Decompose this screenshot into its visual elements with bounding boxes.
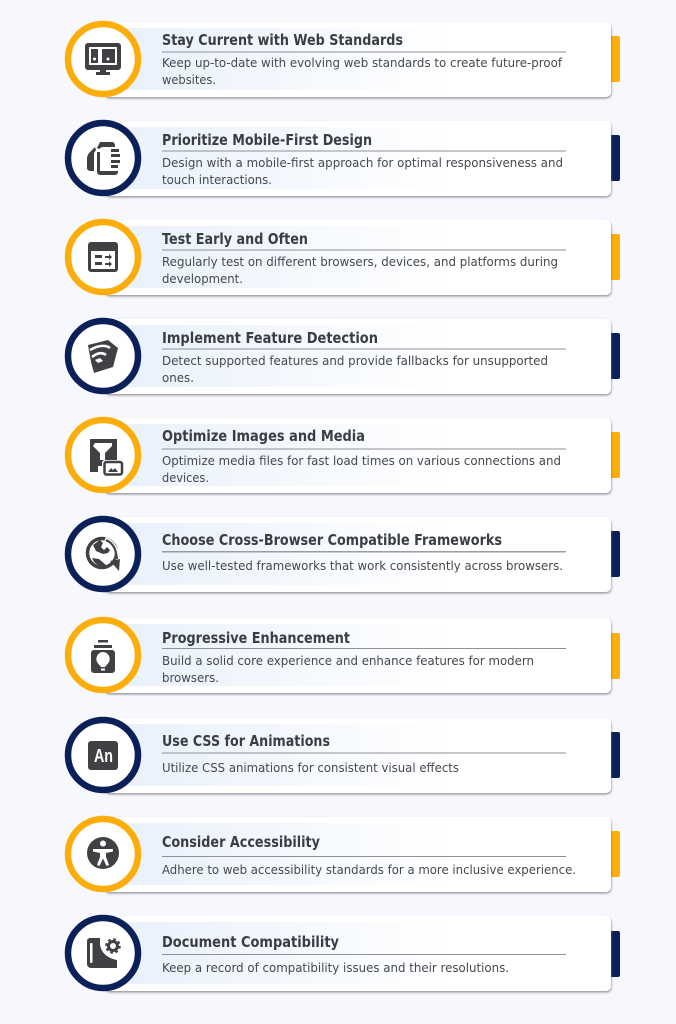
description: Detect supported features and provide fallbacks for unsupported bbox=[162, 353, 548, 368]
panel: Optimize Images and Media bbox=[68, 418, 620, 493]
badge circle bbox=[68, 24, 138, 94]
icon: test window bbox=[88, 242, 118, 272]
icon: book with gear bbox=[87, 938, 120, 968]
icon: layered light bulb bbox=[91, 640, 115, 673]
tab bbox=[606, 333, 620, 379]
tab bbox=[606, 633, 620, 679]
badge circle bbox=[68, 918, 138, 988]
description: development. bbox=[162, 271, 243, 286]
badge circle bbox=[68, 123, 138, 193]
description: browsers. bbox=[162, 670, 219, 685]
heading: Stay Current with Web Standards bbox=[162, 31, 403, 49]
card bbox=[104, 319, 611, 394]
badge circle bbox=[68, 420, 138, 490]
card bbox=[104, 817, 611, 892]
tab bbox=[606, 432, 620, 478]
heading: Implement Feature Detection bbox=[162, 329, 378, 347]
panel: Document Compatibility bbox=[68, 916, 620, 991]
description: Use well-tested frameworks that work consistently across browsers. bbox=[162, 558, 563, 573]
heading: Choose Cross-Browser Compatible Frameworks bbox=[162, 531, 502, 549]
tab bbox=[606, 234, 620, 280]
heading: Document Compatibility bbox=[162, 933, 339, 951]
heading: Use CSS for Animations bbox=[162, 732, 330, 750]
heading: Optimize Images and Media bbox=[162, 427, 365, 445]
description: Keep a record of compatibility issues and their resolutions. bbox=[162, 960, 509, 975]
description: Build a solid core experience and enhance features for modern bbox=[162, 653, 534, 668]
heading: Prioritize Mobile-First Design bbox=[162, 131, 372, 149]
icon: monitor bbox=[85, 43, 121, 75]
icon: An bbox=[88, 741, 118, 770]
panel: Stay Current with Web Standards bbox=[68, 22, 620, 97]
description: websites. bbox=[162, 72, 216, 87]
card bbox=[104, 618, 611, 693]
badge circle bbox=[68, 519, 138, 589]
card bbox=[104, 220, 611, 295]
description: ones. bbox=[162, 370, 194, 385]
heading: Consider Accessibility bbox=[162, 833, 320, 851]
panel: Consider Accessibility bbox=[68, 817, 620, 892]
icon: accessibility person bbox=[87, 837, 119, 869]
description: touch interactions. bbox=[162, 172, 272, 187]
card bbox=[104, 718, 611, 793]
icon: hand holding phone bbox=[87, 142, 120, 175]
badge circle bbox=[68, 819, 138, 889]
badge circle bbox=[68, 720, 138, 790]
card bbox=[104, 22, 611, 97]
icon: cube bbox=[88, 340, 118, 373]
description: Regularly test on different browsers, devices, and platforms during bbox=[162, 254, 558, 269]
card bbox=[104, 916, 611, 991]
heading: Progressive Enhancement bbox=[162, 629, 350, 647]
badge circle bbox=[68, 222, 138, 292]
icon: globe with arrows bbox=[88, 538, 120, 571]
description: Utilize CSS animations for consistent visual effects bbox=[162, 760, 459, 775]
description: Optimize media files for fast load times on various connections and bbox=[162, 453, 561, 468]
description: Design with a mobile-first approach for optimal responsiveness and bbox=[162, 155, 563, 170]
tab bbox=[606, 732, 620, 778]
tab bbox=[606, 531, 620, 577]
panel: Progressive Enhancement bbox=[68, 618, 620, 693]
description: devices. bbox=[162, 470, 209, 485]
icon: funnel and image bbox=[90, 439, 124, 476]
description: Adhere to web accessibility standards for a more inclusive experience. bbox=[162, 862, 576, 877]
tab bbox=[606, 831, 620, 877]
card bbox=[104, 121, 611, 196]
card bbox=[104, 418, 611, 493]
icon: An: An bbox=[94, 746, 113, 766]
tab bbox=[606, 931, 620, 977]
badge circle bbox=[68, 321, 138, 391]
tab bbox=[606, 135, 620, 181]
badge circle bbox=[68, 620, 138, 690]
panel: Test Early and Often bbox=[68, 220, 620, 295]
panel: Prioritize Mobile-First Design bbox=[68, 121, 620, 196]
tab bbox=[606, 36, 620, 82]
heading: Test Early and Often bbox=[162, 230, 308, 248]
panel: Choose Cross-Browser Compatible Frameworks bbox=[68, 517, 620, 592]
description: Keep up-to-date with evolving web standards to create future-proof bbox=[162, 55, 563, 70]
card bbox=[104, 517, 611, 592]
panel: Use CSS for Animations bbox=[68, 718, 620, 793]
panel: Implement Feature Detection bbox=[68, 319, 620, 394]
